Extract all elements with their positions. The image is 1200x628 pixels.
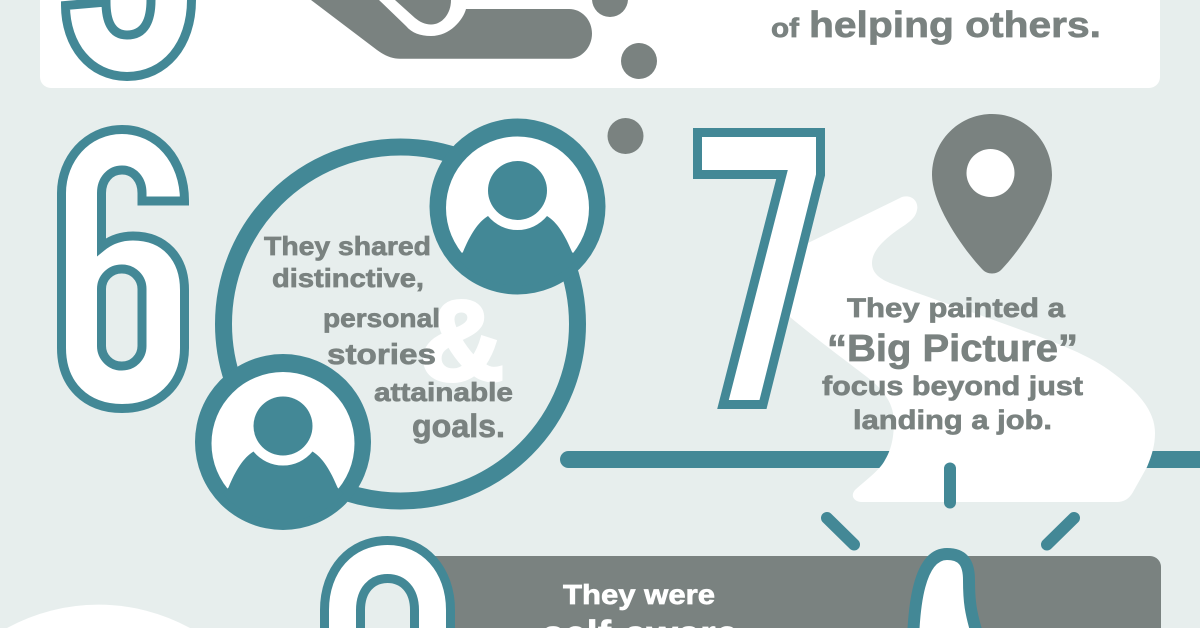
ampersand: & [420,278,504,405]
numeral 5 [66,0,192,76]
icon: lightbulb [913,554,979,628]
icon: light rays [827,468,1074,544]
text: item 8 [542,579,738,628]
icon: person top right [430,118,606,294]
numeral 6 [62,130,184,408]
text: item 7: They painted a [847,293,1066,323]
text: item 6: attainable [374,377,513,407]
text: item 6 [264,231,513,444]
numeral 8 [324,540,450,628]
text: item 6: distinctive, [272,263,424,293]
text: of helping others: helping others. [809,4,1101,45]
text: item 6: stories [327,339,436,371]
numeral 7 [698,132,820,404]
divider line [560,451,1200,468]
text: item 7: focus beyond just [822,371,1083,401]
icon: map pin [932,114,1052,274]
panel: item 5 [40,0,1160,88]
panel: item 8 [324,540,1161,628]
text: of helping others: of [771,13,800,43]
text: item 7: landing a job. [853,405,1052,435]
ring connecting people [224,147,578,501]
icon: helping hand [311,0,592,59]
icon: person bottom left [195,354,371,530]
illustration: winding road [780,196,1155,502]
white blob bottom left [7,605,190,628]
text: item 6: personal [323,303,440,333]
dots trail [592,0,657,154]
text: item 6: They shared [264,231,431,261]
text: item 6: goals. [412,408,505,444]
text: item 8: They were [563,579,715,610]
text: item 7: “Big Picture” [827,328,1078,370]
text: item 7 [822,293,1083,435]
